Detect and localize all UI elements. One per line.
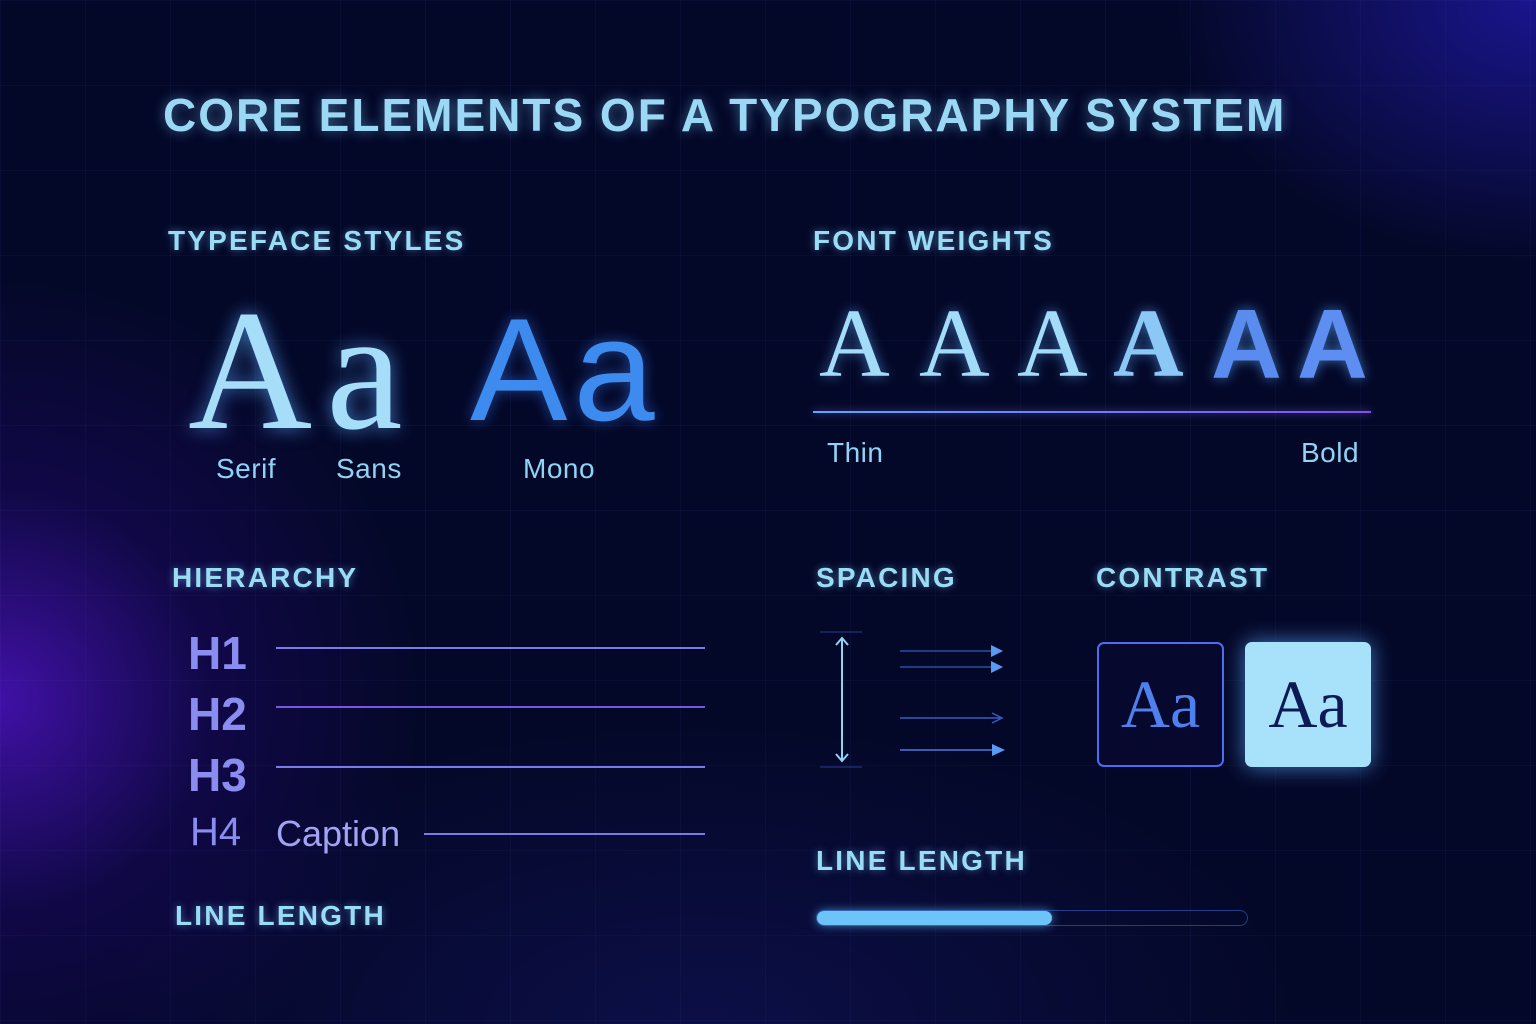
- heading: contrast: CONTRAST: [1096, 562, 1269, 593]
- label: sans: Sans: [336, 453, 402, 484]
- heading: hierarchy: HIERARCHY: [172, 562, 358, 593]
- panel: font weights: A: [1017, 290, 1088, 398]
- panel: font weights: A: [1211, 289, 1282, 399]
- panel: font weights: A: [1297, 289, 1368, 399]
- panel: line length right: [811, 845, 1248, 932]
- panel: font weights: [810, 225, 1373, 468]
- label: thin: Thin: [827, 437, 883, 468]
- H3 row: H3: [188, 749, 247, 801]
- panel: typeface styles: [166, 225, 661, 484]
- heading: line length: LINE LENGTH: [816, 845, 1027, 876]
- heading: line length left: LINE LENGTH: [175, 900, 386, 931]
- weight samples: [817, 289, 1371, 399]
- weight scale line: [813, 411, 1371, 413]
- label: mono: Mono: [523, 453, 595, 484]
- panel: font weights: A: [1113, 290, 1184, 398]
- serif sample Aa: Aa: [188, 276, 417, 466]
- heading: spacing: SPACING: [816, 562, 957, 593]
- H1 row: H1: [188, 627, 247, 679]
- label: serif: Serif: [216, 453, 276, 484]
- panel: hierarchy: [169, 562, 705, 854]
- panel: hierarchy: Caption: [276, 813, 400, 854]
- title: CORE ELEMENTS OF A TYPOGRAPHY SYSTEM: [163, 89, 1286, 141]
- contrast box dark: [1097, 642, 1224, 767]
- panel: font weights: A: [819, 290, 890, 398]
- panel: contrast: [1092, 562, 1388, 784]
- contrast box dark: Aa: [1121, 666, 1200, 742]
- contrast box light: [1245, 642, 1371, 767]
- panel: font weights: A: [919, 290, 990, 398]
- mono sample Aa: Aa: [470, 288, 661, 451]
- heading: font weights: FONT WEIGHTS: [813, 225, 1054, 256]
- contrast box light: Aa: [1268, 666, 1348, 742]
- heading: typeface styles: TYPEFACE STYLES: [168, 225, 466, 256]
- panel: spacing: [814, 562, 1005, 768]
- H2 row: H2: [188, 688, 247, 740]
- line length bar: [816, 910, 1248, 926]
- label: bold: Bold: [1301, 437, 1359, 468]
- H4 caption row: H4: [190, 810, 241, 854]
- vertical spacing arrow: [820, 631, 1005, 768]
